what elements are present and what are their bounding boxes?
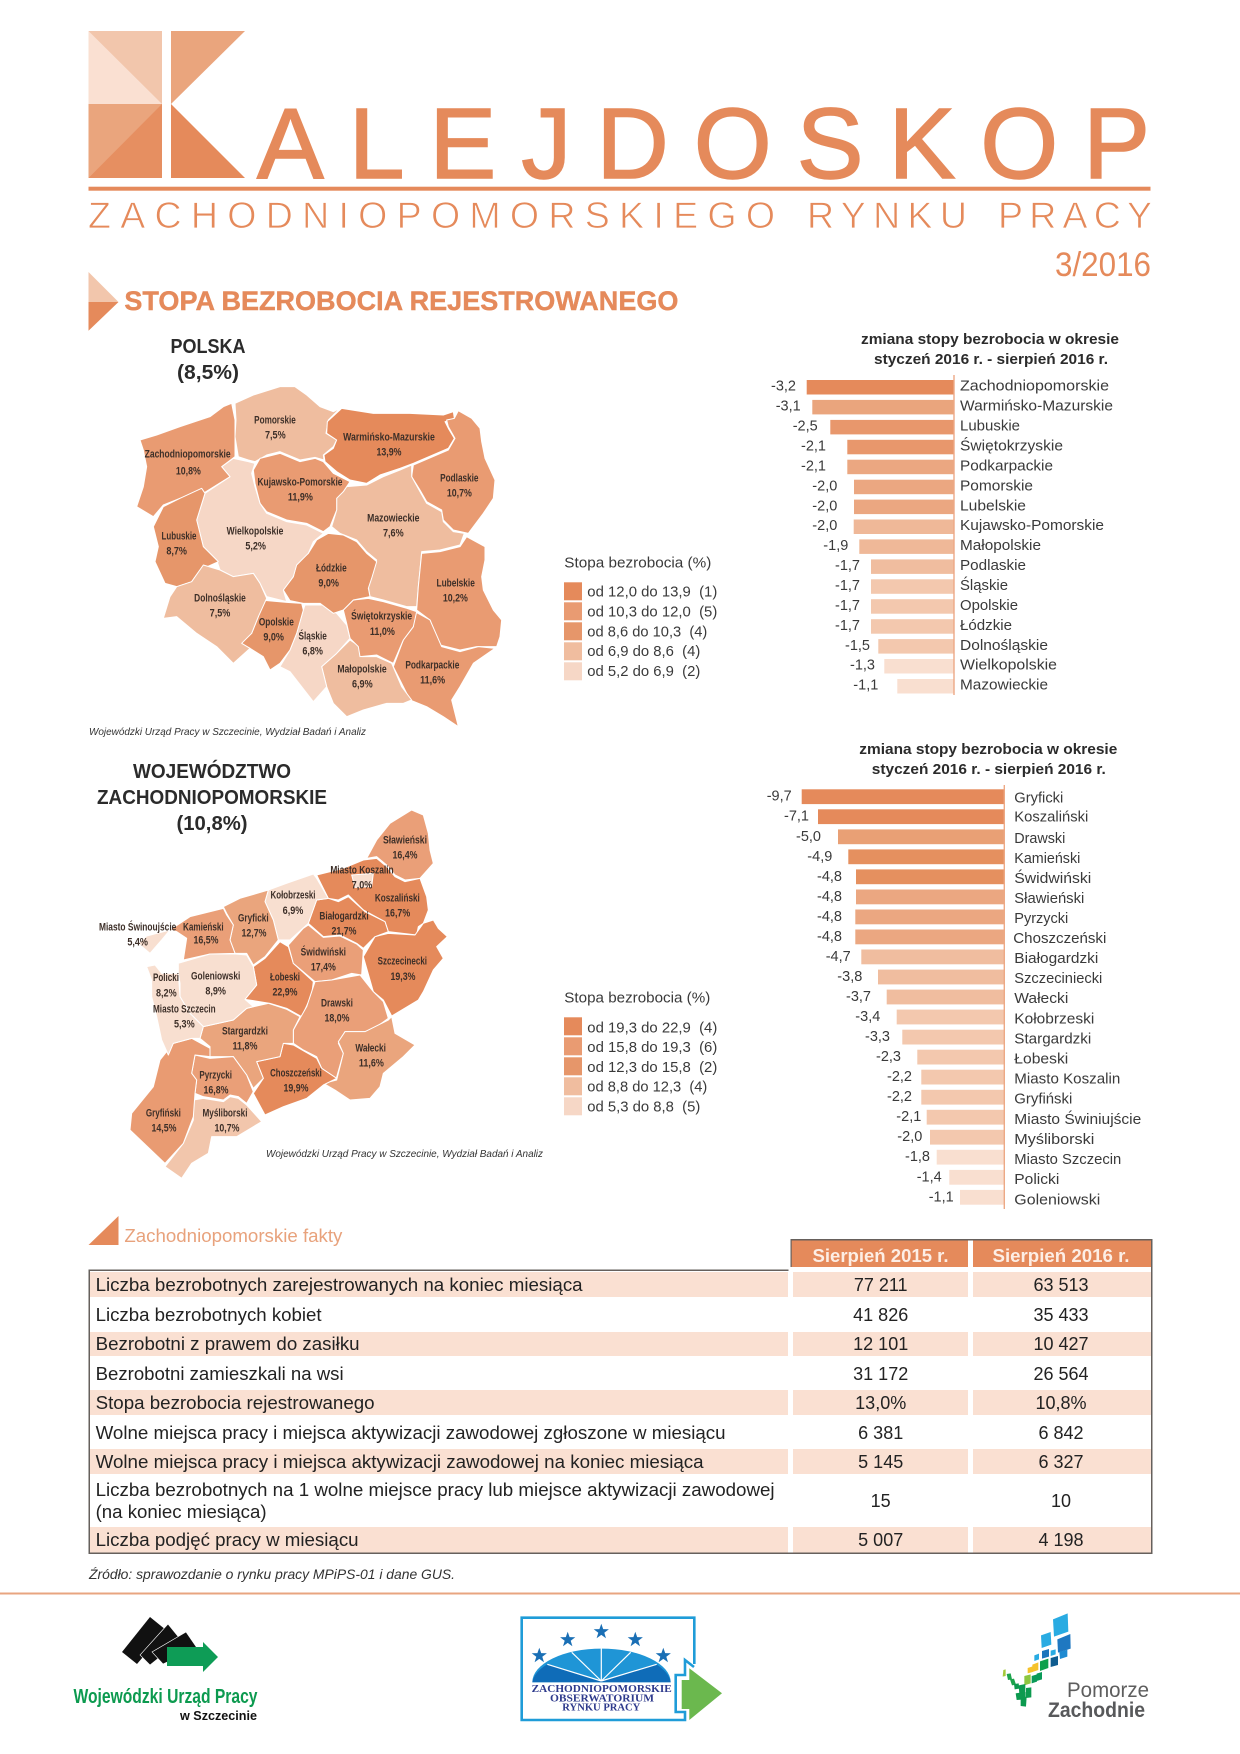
logo text	[532, 1684, 672, 1713]
icon: fan	[532, 1648, 671, 1682]
bar chart: Zachodniopomorskie: Policki	[1014, 1172, 1059, 1188]
bar chart: Zachodniopomorskie: -2,0	[897, 1129, 922, 1145]
bar chart: Polska: -2,0	[812, 498, 837, 514]
bar chart: Zachodniopomorskie: Choszczeński	[1013, 931, 1106, 947]
legend: Zachodniopomorskie: od 5,3 do 8,8 (5)	[587, 1100, 700, 1116]
chart title	[861, 331, 1119, 368]
region labels: Pomorskie	[254, 414, 296, 426]
bar chart: Zachodniopomorskie: -4,7	[826, 949, 851, 965]
bar chart: Zachodniopomorskie: Koszaliński	[1014, 810, 1088, 826]
county labels: 6,9%	[283, 905, 304, 917]
logo text: RYNKU PRACY	[562, 1702, 641, 1713]
chart title: zmiana stopy bezrobocia w okresie	[861, 331, 1119, 348]
county labels: Koszaliński	[375, 892, 420, 904]
legend: Zachodniopomorskie: od 15,8 do 19,3 (6)	[587, 1040, 717, 1056]
bar chart: Polska: Podlaskie	[960, 558, 1026, 574]
bar chart: Polska: Łódzkie	[960, 618, 1012, 634]
legend: Polska: od 8,6 do 10,3 (4)	[587, 624, 707, 640]
region labels: Warmińsko-Mazurskie	[343, 431, 435, 443]
bar chart: Zachodniopomorskie: -1,1	[929, 1189, 954, 1205]
bar chart: Polska: -2,1	[801, 438, 826, 454]
county labels: 5,3%	[174, 1019, 195, 1031]
bar chart: Zachodniopomorskie: Gryficki	[1014, 791, 1063, 807]
county labels: 21,7%	[331, 926, 357, 938]
bar chart: Zachodniopomorskie: Pyrzycki	[1014, 911, 1068, 927]
logo: Zachodniopomorskie Obserwatorium Rynku Pracy	[522, 1618, 722, 1720]
chart title: styczeń 2016 r. - sierpień 2016 r.	[874, 351, 1108, 368]
table: facts	[88, 1239, 1152, 1554]
bar chart: Zachodniopomorskie: Kołobrzeski	[1014, 1012, 1094, 1028]
icon: stars	[532, 1624, 671, 1662]
bar chart: Polska: Warmińsko-Mazurskie	[960, 399, 1113, 415]
table row labels: (na koniec miesiąca)	[96, 1502, 267, 1522]
county labels	[99, 834, 427, 1135]
bar chart: Zachodniopomorskie: -7,1	[784, 809, 809, 825]
bar chart: Zachodniopomorskie: Myśliborski	[1014, 1132, 1094, 1148]
county labels: Łobeski	[270, 971, 300, 983]
county labels: 22,9%	[272, 987, 298, 999]
table values 2016: 4 198	[1038, 1530, 1084, 1550]
table values 2015	[853, 1275, 908, 1550]
county labels: 19,9%	[283, 1083, 309, 1095]
map heading: Polska: (8,5%)	[177, 362, 239, 384]
bar chart: Polska: -1,1	[853, 678, 878, 694]
bar chart: Zachodniopomorskie: -1,8	[905, 1149, 930, 1165]
table values 2016: 6 842	[1038, 1423, 1084, 1443]
bar chart: Zachodniopomorskie: -2,2	[887, 1069, 912, 1085]
region labels: 11,6%	[420, 675, 446, 687]
region labels: Wielkopolskie	[227, 525, 283, 537]
logo: Pomorze Zachodnie: Pomorze	[1067, 1679, 1149, 1702]
bar chart: Zachodniopomorskie: -3,8	[837, 969, 862, 985]
legend: Polska	[564, 556, 717, 680]
bar chart: Zachodniopomorskie	[767, 741, 1141, 1209]
logo: Wojewódzki Urząd Pracy: Wojewódzki Urząd Pracy	[74, 1686, 258, 1708]
legend: Zachodniopomorskie	[564, 991, 717, 1116]
bar chart: Zachodniopomorskie: -2,1	[896, 1109, 921, 1125]
county labels: 11,6%	[359, 1058, 384, 1070]
chart title: styczeń 2016 r. - sierpień 2016 r.	[872, 761, 1106, 778]
county labels: 14,5%	[151, 1123, 177, 1135]
table values 2016: 10,8%	[1035, 1393, 1087, 1413]
region labels: 13,9%	[376, 446, 402, 458]
subtitle: PRACY	[998, 194, 1152, 236]
bar chart: Zachodniopomorskie: Wałecki	[1014, 991, 1068, 1007]
table values 2016: 10 427	[1033, 1334, 1089, 1354]
county labels: Miasto Świnoujście	[99, 920, 176, 933]
section heading: Zachodniopomorskie fakty	[88, 1216, 342, 1246]
table values 2015: 13,0%	[855, 1393, 906, 1413]
table row labels: Liczba bezrobotnych zarejestrowanych na koniec miesiąca	[96, 1275, 584, 1295]
table header	[791, 1240, 1152, 1267]
county labels: 7,0%	[352, 880, 373, 892]
bar chart: Zachodniopomorskie: -2,3	[876, 1049, 901, 1065]
county labels: 5,4%	[127, 937, 148, 949]
region labels: 7,5%	[210, 608, 231, 620]
legend: Polska: od 6,9 do 8,6 (4)	[587, 644, 700, 660]
subtitle	[88, 194, 1152, 236]
bar chart: Polska: -2,5	[793, 419, 818, 435]
bar chart: Zachodniopomorskie: -4,8	[817, 909, 842, 925]
region labels: 9,0%	[263, 632, 284, 644]
region labels: Małopolskie	[337, 663, 387, 675]
bar chart: Zachodniopomorskie: Białogardzki	[1014, 951, 1098, 967]
logo: Wojewódzki Urząd Pracy: w Szczecinie	[179, 1708, 257, 1723]
table values 2016: 26 564	[1033, 1364, 1089, 1384]
table header: Sierpień 2016 r.	[992, 1246, 1130, 1266]
map source note: Polska: Wojewódzki Urząd Pracy w Szczecinie, Wydział Badań i Analiz	[89, 726, 367, 738]
table values 2015: 15	[871, 1491, 891, 1511]
bar chart: Polska: Śląskie	[960, 576, 1008, 594]
chart title: zmiana stopy bezrobocia w okresie	[859, 741, 1117, 758]
bar chart: Polska: -3,2	[771, 379, 796, 395]
bar chart: Zachodniopomorskie: Sławieński	[1014, 891, 1084, 907]
bar chart: Zachodniopomorskie: -4,8	[817, 889, 842, 905]
bar chart: Polska: -1,7	[835, 558, 860, 574]
table values 2015: 12 101	[853, 1334, 908, 1354]
region labels: Śląskie	[298, 629, 327, 642]
region labels: 6,8%	[302, 646, 323, 658]
bar chart: Zachodniopomorskie: -3,7	[846, 989, 871, 1005]
county labels: Pyrzycki	[199, 1069, 232, 1081]
bar chart: Zachodniopomorskie: Miasto Świniujście	[1014, 1110, 1141, 1128]
subtitle: RYNKU	[807, 194, 967, 236]
county labels: 12,7%	[241, 928, 267, 940]
table borders	[88, 1239, 1152, 1554]
county labels: Gryfiński	[146, 1108, 181, 1120]
region labels: Kujawsko-Pomorskie	[257, 476, 343, 488]
county labels: 8,9%	[205, 986, 226, 998]
bar chart: Polska: -1,7	[835, 618, 860, 634]
subtitle: ZACHODNIOPOMORSKIEGO	[88, 194, 775, 236]
table row labels: Bezrobotni zamieszkali na wsi	[96, 1364, 344, 1384]
bar chart: Zachodniopomorskie: -2,2	[887, 1089, 912, 1105]
map source note: Zachodniopomorskie: Wojewódzki Urząd Pracy w Szczecinie, Wydział Badań i Analiz	[266, 1148, 544, 1160]
bar chart: Polska: Zachodniopomorskie	[960, 379, 1109, 395]
bar chart: Polska: -1,9	[823, 538, 848, 554]
county labels: Policki	[153, 972, 179, 984]
icon: K logo block	[88, 31, 245, 178]
table row labels: Wolne miejsca pracy i miejsca aktywizacji zawodowej zgłoszone w miesiącu	[96, 1423, 726, 1443]
table values 2016: 6 327	[1038, 1452, 1084, 1472]
region labels: Podkarpackie	[405, 659, 459, 671]
bar chart: Zachodniopomorskie: -3,4	[855, 1009, 880, 1025]
county labels: 16,7%	[385, 908, 411, 920]
table row labels: Liczba podjęć pracy w miesiącu	[96, 1530, 359, 1550]
county labels: 17,4%	[311, 962, 336, 974]
table values 2015: 5 007	[858, 1530, 903, 1550]
legend: Zachodniopomorskie: od 12,3 do 15,8 (2)	[587, 1060, 717, 1076]
bar chart: Zachodniopomorskie: Świdwiński	[1014, 869, 1091, 887]
bar chart: Polska: Pomorskie	[960, 478, 1033, 494]
bar chart: Zachodniopomorskie: Goleniowski	[1014, 1192, 1100, 1208]
bar chart: Polska: Dolnośląskie	[960, 638, 1048, 654]
table row labels: Stopa bezrobocia rejestrowanego	[96, 1393, 375, 1413]
table values 2015: 41 826	[853, 1305, 908, 1325]
bar chart: Zachodniopomorskie: Kamieński	[1014, 851, 1080, 867]
section heading: Zachodniopomorskie fakty: Zachodniopomorskie fakty	[124, 1226, 342, 1246]
county labels: 8,2%	[156, 988, 177, 1000]
logo frame	[522, 1618, 694, 1720]
table values 2016	[1033, 1275, 1089, 1550]
bar chart: Polska: Świętokrzyskie	[960, 436, 1063, 454]
bar chart: Polska: -1,7	[835, 598, 860, 614]
table values 2016: 63 513	[1033, 1275, 1089, 1295]
logo: Pomorze Zachodnie: Zachodnie	[1048, 1699, 1145, 1722]
legend: Zachodniopomorskie: od 19,3 do 22,9 (4)	[587, 1020, 717, 1036]
legend: Polska: od 5,2 do 6,9 (2)	[587, 664, 700, 680]
bar chart: Polska: Małopolskie	[960, 538, 1041, 554]
bar chart: Polska: Kujawsko-Pomorskie	[960, 518, 1104, 534]
bar chart: Polska: Lubuskie	[960, 419, 1020, 435]
region labels: Lubuskie	[161, 530, 197, 542]
row bands	[90, 1272, 1151, 1553]
icon: pixel checkmark	[1003, 1613, 1071, 1707]
county labels: Białogardzki	[319, 910, 369, 922]
logo: Pomorze Zachodnie	[1003, 1613, 1149, 1722]
bar chart: Zachodniopomorskie: -1,4	[917, 1169, 942, 1185]
table values 2016: 10	[1051, 1491, 1071, 1511]
region labels: 10,8%	[176, 465, 201, 477]
bar chart: Zachodniopomorskie: -3,3	[865, 1029, 890, 1045]
bar chart: Zachodniopomorskie: Miasto Koszalin	[1014, 1072, 1120, 1088]
county labels: 16,8%	[203, 1085, 229, 1097]
legend: Polska: Stopa bezrobocia (%)	[564, 556, 711, 572]
county labels: Miasto Koszalin	[330, 865, 394, 877]
logo text: OBSERWATORIUM	[550, 1694, 654, 1705]
region labels: 10,7%	[447, 488, 472, 500]
map heading: Zachodniopomorskie: ZACHODNIOPOMORSKIE	[97, 787, 327, 809]
bar chart: Polska: -1,7	[835, 578, 860, 594]
region labels: 5,2%	[245, 541, 266, 553]
chart title	[859, 741, 1117, 778]
county labels: 18,0%	[324, 1013, 350, 1025]
heading text: STOPA BEZROBOCIA REJESTROWANEGO	[124, 286, 678, 316]
bar chart: Zachodniopomorskie: Łobeski	[1014, 1052, 1068, 1068]
bar chart: Polska: -2,0	[812, 518, 837, 534]
table row labels: Liczba bezrobotnych na 1 wolne miejsce pracy lub miejsce aktywizacji zawodowej	[96, 1480, 775, 1500]
region labels: Podlaskie	[440, 472, 479, 484]
icon: black cards with green arrow	[122, 1617, 218, 1672]
map: Polska voivodeships	[137, 387, 502, 727]
county labels: 16,5%	[193, 935, 219, 947]
map heading: Polska	[170, 336, 246, 384]
bar chart: Polska: -3,1	[776, 399, 801, 415]
county labels: 16,4%	[392, 850, 418, 862]
table source note: Źródło: sprawozdanie o rynku pracy MPiPS-01 i dane GUS.	[88, 1566, 455, 1582]
issue number: 3/2016	[1055, 246, 1151, 284]
legend: Zachodniopomorskie: od 8,8 do 12,3 (4)	[587, 1080, 707, 1096]
region labels: Lubelskie	[436, 577, 475, 589]
region labels: 7,6%	[383, 528, 404, 540]
logo text: ZACHODNIOPOMORSKIE	[532, 1684, 672, 1695]
county labels: 19,3%	[390, 971, 416, 983]
bar chart: Polska: Mazowieckie	[960, 678, 1048, 694]
table values 2016: 35 433	[1033, 1305, 1089, 1325]
county labels: Sławieński	[383, 834, 427, 846]
region labels: 9,0%	[318, 578, 339, 590]
region labels: 6,9%	[352, 679, 373, 691]
region labels: Świętokrzyskie	[351, 609, 412, 622]
bar chart: Polska: Lubelskie	[960, 498, 1026, 514]
county labels: Gryficki	[238, 912, 269, 924]
county labels: Myśliborski	[202, 1108, 248, 1120]
map heading: Polska: POLSKA	[170, 336, 246, 358]
bar chart: Polska: Opolskie	[960, 598, 1018, 614]
county labels: Miasto Szczecin	[153, 1004, 216, 1016]
region labels: 7,5%	[265, 429, 286, 441]
county labels: 10,7%	[214, 1123, 240, 1135]
region labels: 11,0%	[370, 626, 395, 638]
county labels: 11,8%	[232, 1041, 258, 1053]
county labels: Stargardzki	[222, 1026, 268, 1038]
bar chart: Zachodniopomorskie: Drawski	[1014, 831, 1065, 847]
map heading: Zachodniopomorskie	[97, 759, 327, 835]
bar chart: Polska: Podkarpackie	[960, 458, 1053, 474]
logo: Wojewódzki Urząd Pracy	[74, 1617, 258, 1723]
table values 2015: 6 381	[858, 1423, 903, 1443]
county labels: Choszczeński	[270, 1068, 322, 1080]
bar chart: Zachodniopomorskie: Gryfiński	[1014, 1092, 1072, 1108]
region labels: 8,7%	[166, 545, 187, 557]
bar chart: Zachodniopomorskie: -5,0	[796, 829, 821, 845]
map: Zachodniopomorskie counties	[99, 810, 447, 1178]
table values 2015: 31 172	[853, 1364, 908, 1384]
section heading: stopa bezrobocia	[88, 272, 678, 331]
icon: section arrow	[88, 272, 118, 331]
region labels: Opolskie	[259, 617, 294, 629]
table row labels	[96, 1275, 775, 1550]
bar chart: Polska: -2,1	[801, 458, 826, 474]
title: ALEJDOSKOP	[257, 88, 1150, 200]
bar chart: Polska: -2,0	[812, 478, 837, 494]
bar chart: Polska: -1,3	[850, 658, 875, 674]
bar chart: Zachodniopomorskie: -4,8	[817, 869, 842, 885]
bar chart: Zachodniopomorskie: -4,9	[807, 849, 832, 865]
county labels: Świdwiński	[301, 945, 346, 958]
county labels: Goleniowski	[191, 971, 240, 983]
bar chart: Polska: -1,5	[845, 638, 870, 654]
county labels: Kołobrzeski	[270, 889, 316, 901]
region labels: Zachodniopomorskie	[145, 448, 231, 460]
county labels: Wałecki	[355, 1042, 386, 1054]
table values 2015: 5 145	[858, 1452, 903, 1472]
region labels: 11,9%	[288, 492, 313, 504]
legend: Polska: od 10,3 do 12,0 (5)	[587, 604, 717, 620]
bar chart: Polska	[771, 331, 1119, 695]
county labels: Kamieński	[183, 921, 224, 933]
county labels: Drawski	[321, 998, 353, 1010]
legend: Polska: od 12,0 do 13,9 (1)	[587, 585, 717, 601]
table row labels: Bezrobotni z prawem do zasiłku	[96, 1334, 360, 1354]
legend: Zachodniopomorskie: Stopa bezrobocia (%)	[564, 991, 710, 1007]
map heading: Zachodniopomorskie: (10,8%)	[176, 813, 248, 835]
bar chart: Zachodniopomorskie: -4,8	[817, 929, 842, 945]
table row labels: Liczba bezrobotnych kobiet	[96, 1305, 322, 1325]
bar chart: Polska: Wielkopolskie	[960, 658, 1057, 674]
table header: Sierpień 2015 r.	[812, 1246, 948, 1266]
map heading: Zachodniopomorskie: WOJEWÓDZTWO	[133, 759, 291, 783]
region labels: Mazowieckie	[367, 512, 420, 524]
bar chart: Zachodniopomorskie: Stargardzki	[1014, 1032, 1091, 1048]
region labels: 10,2%	[443, 593, 468, 605]
bar chart: Zachodniopomorskie: -9,7	[767, 789, 792, 805]
table values 2015: 77 211	[854, 1275, 908, 1295]
region labels: Łódzkie	[316, 562, 347, 574]
table row labels: Wolne miejsca pracy i miejsca aktywizacji zawodowej na koniec miesiąca	[96, 1452, 705, 1472]
region labels: Dolnośląskie	[194, 593, 246, 605]
bar chart: Zachodniopomorskie: Szczeciniecki	[1014, 971, 1102, 987]
bar chart: Zachodniopomorskie: Miasto Szczecin	[1014, 1152, 1121, 1168]
icon: green arrow	[682, 1668, 722, 1720]
county labels: Szczecinecki	[378, 956, 427, 968]
header masthead	[88, 31, 1152, 284]
region labels	[145, 414, 479, 691]
